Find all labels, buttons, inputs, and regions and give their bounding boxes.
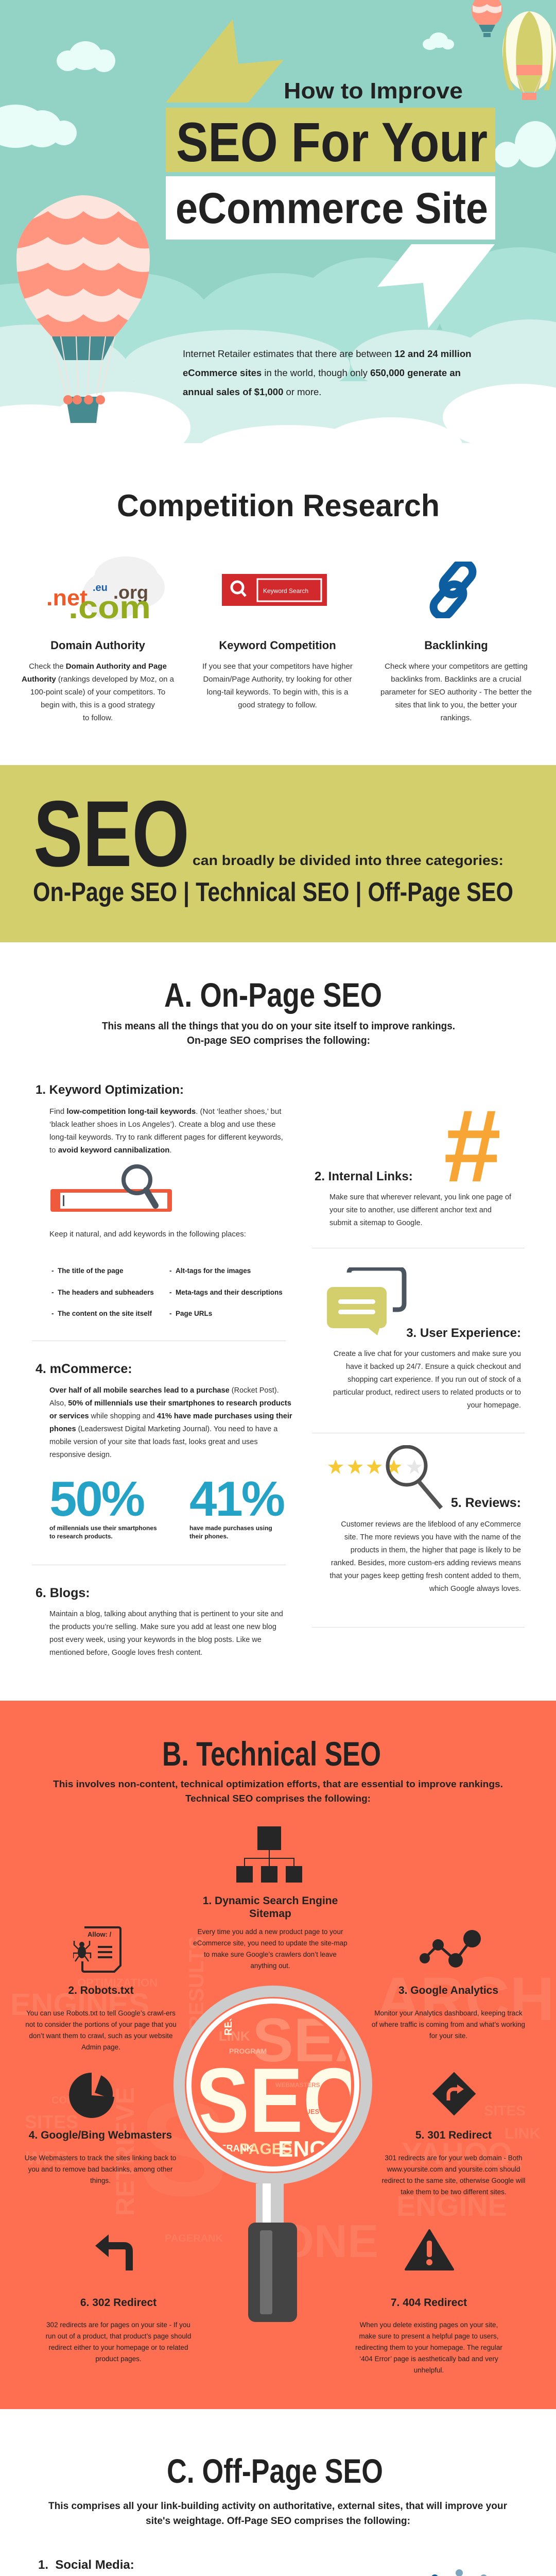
panel: user experience [333,1326,521,1410]
text: When you delete existing pages on your site, make sure to present a helpful page to users, redirecting them to your homepage. The regular ‘404 Error’ page is aesthetically bad and very unhelpful. [355,2321,502,2374]
heading: C. Off-Page SEO: This comprises all your link-building activity on authoritative, external sites, that will improve your [48,2501,508,2512]
section: Technical SEO: ENGINE [396,2190,507,2222]
heading: Keyword Competition [219,639,336,652]
text: to follow. [83,714,113,722]
heading: 5. Reviews: [451,1496,521,1510]
heading [53,1735,503,1804]
text: Monitor your Analytics dashboard, keeping track of where traffic is coming from and what’s working for your site. [372,2009,525,2040]
magnifier illustration: RESULTS [223,1988,234,2036]
section: Technical SEO [0,1701,556,2409]
text: Check where your competitors are getting backlinks from. Backlinks are a crucial parameter for SEO authority - The better the sites that link to you, the better your rankings. [380,662,532,722]
item: robots.txt [25,1926,177,2051]
heading: 4. mCommerce: [36,1362,132,1376]
icon: domains [46,556,165,621]
heading: Sitemap [249,1908,291,1920]
heading: 2. Internal Links: [315,1170,413,1183]
item: 302 redirect [46,2234,191,2363]
icon: stars and magnifier [328,1445,443,1510]
section: Technical SEO: OPTIMIZATION [77,1976,158,1989]
heading: 6. 302 Redirect [80,2297,157,2309]
stat: 41%: their phones. [189,1533,228,1540]
heading: C. Off-Page SEO: C. Off-Page SEO [167,2452,383,2490]
heading: 7. 404 Redirect [391,2297,467,2309]
text: Maintain a blog, talking about anything that is pertinent to your site and the products you’re selling. Make sure you add at least one new blog post every week, using your keywords in the blog posts. Like we mentioned before, Google loves fresh content. [49,1610,283,1657]
list: keyword places: - Meta-tags and their descriptions [169,1289,283,1296]
text: places: Keep it natural, and add keywords in the following places: [49,1230,246,1239]
heading: A. On-Page SEO: A. On-Page SEO [164,976,382,1014]
text: You can use Robots.txt to tell Google’s crawl-ers not to consider the portions of your page that you don’t want them to crawl, such as your website Admin page. [25,2009,177,2051]
section: Technical SEO: ONE [278,2216,378,2267]
list: keyword places: - Page URLs [169,1310,212,1317]
heading: 5. 301 Redirect [415,2129,492,2141]
heading: A. On-Page SEO: On-page SEO comprises the following: [187,1035,370,1046]
heading: 6. Blogs: [36,1586,90,1600]
section: Technical SEO: SITES [484,2103,526,2119]
intro text [183,348,471,397]
heading: C. Off-Page SEO [0,2445,556,2527]
heading: 4. Google/Bing Webmasters [29,2129,172,2141]
icon: analytics [420,1930,481,2094]
magnifier illustration: SEA [252,2006,376,2075]
heading: 3. User Experience: [406,1326,521,1340]
icon: search bar [50,1164,172,1212]
icon: domains: .net [46,585,88,611]
list: keyword places: - The headers and subheaders [51,1289,154,1296]
icon: domains: .org [113,582,148,603]
heading: A. On-Page SEO: This means all the things that you do on your site itself to improve rankings. [102,1021,455,1032]
title [176,78,488,232]
icon: robots: Allow: / [88,1930,112,1938]
heading: C. Off-Page SEO: site's weightage. Off-Page SEO comprises the following: [146,2516,410,2527]
panel: backlinking [380,562,532,722]
heading: 1. Social Media: [38,2558,134,2572]
icon: link building network [408,2569,511,2576]
heading: This involves non-content, technical optimization efforts, that are essential to improve rankings. [53,1779,503,1789]
item: webmasters [25,2073,176,2184]
magnifier illustration: PAGERANK [201,2143,253,2154]
banner: SEO categories [0,765,556,942]
section: Technical SEO: SITES [25,2111,78,2132]
intro text: Internet Retailer estimates that there are between 12 and 24 million [183,348,471,359]
section: Technical SEO: CONTENT [51,2095,101,2106]
icon: pie chart [69,2073,114,2118]
text: Every time you add a new product page to your eCommerce site, you need to update the site-map to make sure Google’s crawlers don’t leave anything out. [193,1928,348,1970]
title: eCommerce Site [176,184,488,232]
item: sitemap [186,1826,359,2166]
list: keyword places: - Alt-tags for the images [169,1267,251,1275]
panel: keyword competition [202,574,353,709]
section: Technical SEO: RETRIEVE [111,2087,140,2216]
section: Technical SEO: WEB [484,2155,523,2173]
text: Create a live chat for your customers and make sure you have it backed up 24/7. Ensure a quick checkout and shopping cart experience. If you run out of stock of a particular product, redirect users to related products or to your homepage. [333,1350,521,1410]
stat: 50%: 50% [49,1471,144,1527]
magnifier illustration: ENGINE [278,2137,365,2162]
section: Technical SEO: YAHOO [402,2137,512,2171]
icon: keyword search [222,574,327,606]
magnifier illustration [173,1986,372,2322]
panel: mCommerce [36,1362,292,1540]
text: Check the Domain Authority and Page Authority (rankings developed by Moz, on a 100-point scale) of your competitors. To begin with, this is a good strategy [22,662,174,709]
heading: 1. Dynamic Search Engine [203,1895,338,1907]
section: Technical SEO: RESULTS [185,1936,208,2030]
text: 302 redirects are for pages on your site - If you run out of a product, that product’s page should redirect either to your homepage or to related product pages. [46,2321,191,2363]
icon: return arrow [95,2234,133,2270]
item: 301 redirect [381,2072,526,2196]
magnifier illustration: WEBMASTERS [275,2081,320,2089]
text: Make sure that wherever relevant, you link one page of your site to another, use different anchor text and submit a sitemap to Google. [329,1193,511,1227]
banner: SEO categories: can broadly be divided into three categories: [193,853,503,868]
list: keyword places [51,1267,283,1317]
icon: keyword search: Keyword Search [263,587,308,595]
text: Find low-competition long-tail keywords. (Not ‘leather shoes,’ but ‘black leather shoes in Los Angeles’). Create a blog and use these long-tail keywords. Try to rank different pages for different keywords, to avoid keyword cannibalization. [49,1107,283,1155]
stat: 50%: of millennials use their smartphones [49,1524,157,1532]
banner: SEO categories: SEO [33,781,189,886]
section: Technical SEO: PAGERANK [165,2233,223,2244]
item: 404 redirect [355,2229,502,2374]
panel: blogs [36,1586,283,1657]
icon: warning [405,2228,454,2272]
icon: chain link [429,562,477,618]
intro text: annual sales of $1,000 or more. [183,386,321,397]
magnifier illustration: HAT [331,2098,351,2109]
icon: chat bubbles [327,1267,407,1335]
header: sky scene [0,0,556,443]
intro text: eCommerce sites in the world, though only 650,000 generate an [183,367,461,378]
section: Technical SEO: ENGINES [10,1987,149,2022]
text: Use Webmasters to track the sites linking back to you and to remove bad backlinks, among other things. [25,2154,176,2184]
panel: internal links [315,1170,512,1227]
title: How to Improve [284,78,463,104]
panel: domain authority [22,556,174,722]
heading: B. Technical SEO [162,1735,381,1773]
text: 301 redirects are for your web domain - Both www.yoursite.com and yoursite.com should redirect to the same site, otherwise Google will take them to be two different sites. [381,2154,526,2196]
magnifier illustration: LINK [219,2028,250,2044]
icon: domains: .eu [93,582,108,594]
panel: keyword optimization [36,1083,283,1317]
heading: Backlinking [424,639,488,652]
panel: reviews [329,1496,521,1593]
section: Technical SEO: WEB [26,2147,69,2168]
stat: 41%: have made purchases using [189,1524,272,1532]
heading [203,1895,338,1920]
text: Over half of all mobile searches lead to a purchase (Rocket Post). Also, 50% of millennials use their smartphones to research products or services while shopping and 41% have made purchases using their phones (Leaderswest Digital Marketing Journal). You need to have a mobile version of your site that loads fast, looks great and uses responsive design. [49,1386,292,1459]
text: Customer reviews are the lifeblood of any eCommerce site. The more reviews you have with the name of the products in them, the higher that page is likely to be ranked. Besides, more custom-ers adding reviews means that your pages keep getting fresh content added to them, which Google always loves. [329,1520,521,1593]
heading: 3. Google Analytics [398,1985,498,1996]
icon: diamond arrow [432,2072,476,2115]
section: Technical SEO: LINK [505,2125,541,2142]
magnifier illustration: PROGRAM [229,2047,267,2055]
text: If you see that your competitors have higher Domain/Page Authority, try looking for other long-tail keywords. To begin with, this is a good strategy to follow. [202,662,353,709]
heading: Domain Authority [50,639,145,652]
heading: Technical SEO comprises the following: [185,1793,371,1804]
stat: 41%: 41% [189,1471,284,1527]
icon: robots [70,1926,121,2092]
section: Technical SEO: S [139,2075,228,2224]
heading: A. On-Page SEO [102,976,455,1046]
item: google analytics [372,1930,525,2040]
section: Technical SEO: ARCH [376,1964,554,2033]
magnifier illustration: TECHNIQUES [275,2108,320,2115]
magnifier illustration: PAGES [239,2141,292,2158]
icon: sitemap [186,1826,357,2164]
stat: 50%: to research products. [49,1533,113,1540]
heading: 1. Keyword Optimization: [36,1083,184,1097]
list: keyword places: - The title of the page [51,1267,124,1275]
heading: 2. Robots.txt [68,1985,134,1996]
list: keyword places: - The content on the site itself [51,1310,152,1317]
